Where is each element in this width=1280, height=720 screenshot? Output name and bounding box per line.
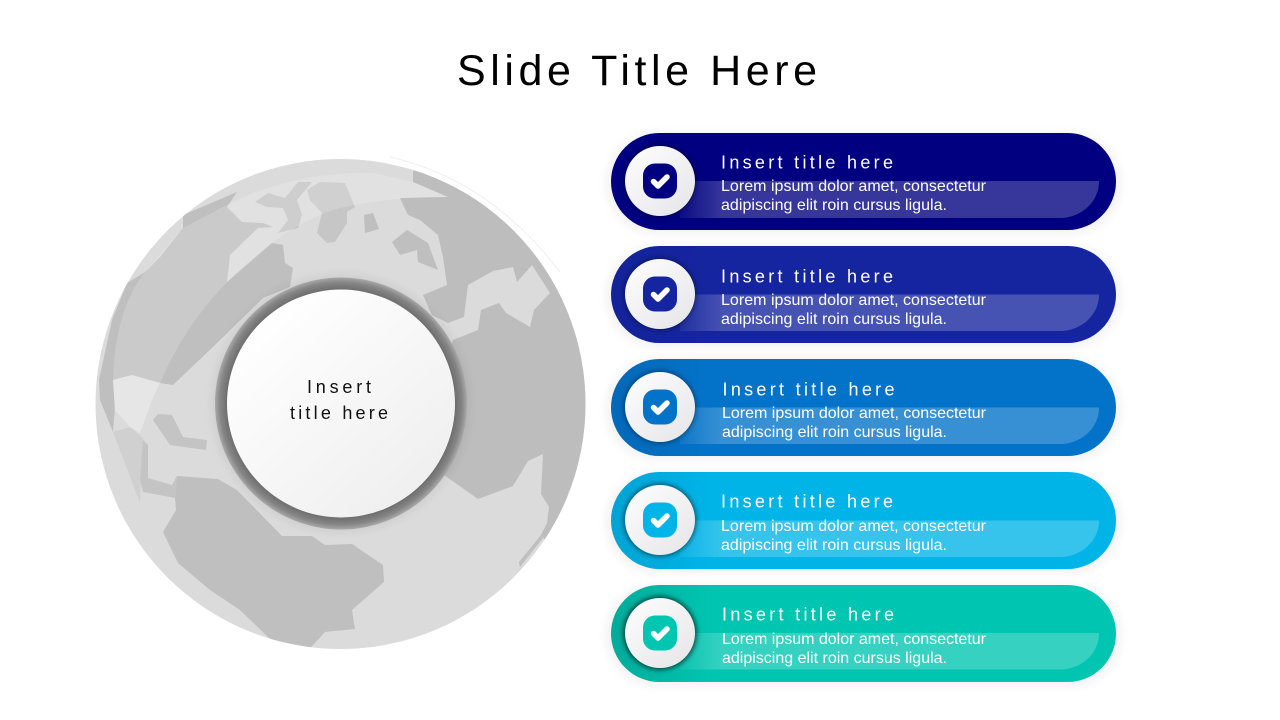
globe base xyxy=(96,159,586,649)
badge disc xyxy=(227,290,455,518)
island: top centre xyxy=(307,182,355,243)
card text: Lorem ipsum dolor amet, consectetur xyxy=(721,518,987,535)
title: Slide Title Here xyxy=(457,47,817,95)
island: lower left xyxy=(153,414,207,450)
badge label xyxy=(290,377,388,423)
card body xyxy=(611,472,1116,569)
card shadow xyxy=(606,359,1121,460)
icon disc xyxy=(623,370,697,444)
light land left xyxy=(113,375,160,433)
card text xyxy=(721,292,987,328)
ocean: lower xyxy=(163,476,384,660)
icon disc xyxy=(623,257,697,331)
card text: adipiscing elit roin cursus ligula. xyxy=(721,537,947,554)
left land strip xyxy=(113,427,143,503)
card band xyxy=(680,520,1099,557)
highlight lens xyxy=(113,182,404,382)
card text: Lorem ipsum dolor amet, consectetur xyxy=(722,405,987,422)
card body xyxy=(611,133,1116,230)
card 2 xyxy=(606,246,1121,347)
card 5 xyxy=(606,585,1121,686)
card text xyxy=(721,518,987,554)
card 4 xyxy=(606,472,1121,573)
card text: adipiscing elit roin cursus ligula. xyxy=(721,197,947,214)
sliver xyxy=(519,535,543,567)
card text: Lorem ipsum dolor amet, consectetur xyxy=(722,631,987,648)
badge ring xyxy=(215,278,467,530)
card body xyxy=(611,359,1116,456)
island: top Y xyxy=(255,182,312,233)
icon disc xyxy=(623,144,697,218)
card text: adipiscing elit roin cursus ligula. xyxy=(722,650,947,667)
card title: Insert title here xyxy=(721,266,893,286)
card text xyxy=(722,405,987,441)
ocean: right xyxy=(400,170,586,540)
ocean: left xyxy=(99,192,293,432)
island: small xyxy=(364,213,379,233)
badge label: title here xyxy=(290,403,388,423)
card title: Insert title here xyxy=(722,604,894,624)
card title: Insert title here xyxy=(721,152,893,172)
card shadow xyxy=(606,585,1121,686)
card band xyxy=(680,408,1099,444)
card 1 xyxy=(606,133,1121,234)
card 3 xyxy=(606,359,1121,460)
card band xyxy=(680,181,1099,218)
card title: Insert title here xyxy=(722,380,894,400)
card text: adipiscing elit roin cursus ligula. xyxy=(721,311,947,328)
badge label: Insert xyxy=(307,377,371,397)
card band xyxy=(680,294,1099,331)
icon disc xyxy=(623,483,697,557)
badge shadow xyxy=(213,276,469,532)
island: right xyxy=(392,230,438,270)
card text: Lorem ipsum dolor amet, consectetur xyxy=(721,178,987,195)
card text xyxy=(721,178,987,214)
card title: Insert title here xyxy=(721,492,893,512)
card shadow xyxy=(606,246,1121,347)
card text: Lorem ipsum dolor amet, consectetur xyxy=(721,292,987,309)
icon disc xyxy=(622,596,698,670)
card text: adipiscing elit roin cursus ligula. xyxy=(722,424,947,441)
card body xyxy=(611,246,1116,343)
map shapes xyxy=(99,170,586,648)
card text xyxy=(722,631,987,667)
globe xyxy=(96,156,586,649)
card shadow xyxy=(606,472,1121,573)
card body xyxy=(611,585,1116,682)
left coast strip xyxy=(140,440,177,498)
card shadow xyxy=(606,133,1121,234)
card band xyxy=(680,633,1099,670)
thin highlight arc xyxy=(390,157,560,272)
centre badge xyxy=(213,276,469,532)
